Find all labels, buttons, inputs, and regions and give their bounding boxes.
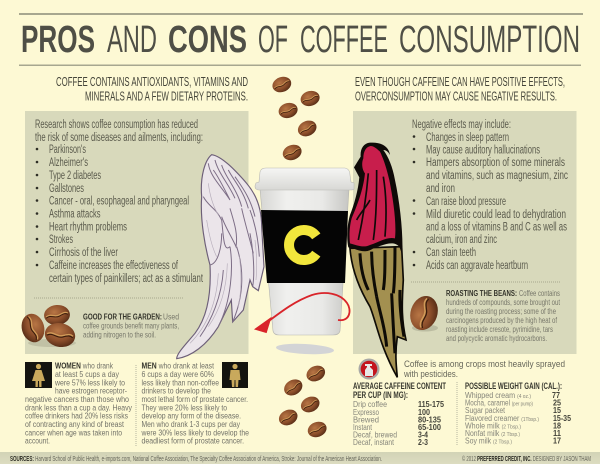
- icon: coffee cup: [255, 168, 354, 356]
- women study text: [25, 362, 132, 446]
- women study text: account.: [25, 436, 50, 446]
- weight gain table: Whipped cream (4 oz.): [465, 391, 531, 400]
- cons bullet list: calcium, iron and zinc: [426, 234, 497, 246]
- weight gain table: 25: [553, 398, 561, 408]
- caffeine content table: 115-175: [418, 400, 444, 409]
- women study text: at least 5 cups a day: [55, 370, 119, 379]
- good for the garden note: adding nitrogen to the soil.: [83, 330, 156, 340]
- icon: man: [222, 362, 248, 388]
- pros bullet list: Cancer - oral, esophageal and pharyngeal: [49, 196, 189, 208]
- caffeine content table: 3-4: [418, 430, 428, 440]
- pros intro text: the risk of some diseases and ailments, including:: [35, 132, 203, 144]
- weight gain table: [465, 381, 571, 446]
- men study text: 6 cups a day were 60%: [142, 370, 214, 379]
- pros intro text: Research shows coffee consumption has reduced: [35, 119, 198, 131]
- pros bullet list: Strokes: [49, 234, 73, 246]
- weight gain table: Mocha, caramel (per pump): [465, 398, 533, 408]
- caffeine content table: Decaf, instant: [353, 438, 395, 447]
- roasting the beans note: Coffee contains: [519, 288, 560, 298]
- caffeine content table: Decaf, brewed: [353, 430, 397, 440]
- weight gain table: Soy milk (2 Tbsp.): [465, 436, 512, 446]
- weight gain table: 15: [553, 406, 561, 415]
- men study text: develop any form of the disease.: [142, 412, 241, 420]
- women study text: have estrogen receptor-: [55, 386, 127, 396]
- good for the garden note: [83, 312, 179, 340]
- cons bullet list: and iron: [426, 183, 455, 195]
- women study text: of contracting any kind of breast: [25, 420, 125, 429]
- icon: pesticide sprayer: [358, 358, 380, 380]
- men study text: Men who drank 1-3 cups per day: [142, 420, 240, 429]
- men study text: less likely than non-coffee: [142, 378, 219, 388]
- cup sleeve: [261, 210, 348, 283]
- pros intro text: [35, 119, 203, 144]
- left intro heading: MINERALS AND A FEW DIETARY PROTEINS.: [85, 88, 248, 104]
- pros bullet list: Parkinson's: [49, 144, 86, 156]
- footer: [0, 452, 600, 464]
- men study text: deadliest form of prostate cancer.: [142, 436, 244, 446]
- cons bullet list: [412, 119, 568, 272]
- pesticide callout: with pesticides.: [403, 369, 458, 379]
- cons bullet list: Acids can aggravate heartburn: [426, 260, 528, 272]
- caffeine content table: 80-135: [418, 416, 441, 424]
- good for the garden note: Used: [163, 312, 179, 322]
- pros bullet list: Alzheimer's: [49, 157, 88, 169]
- sources: SOURCES: Harvard School of Public Health, e-imports.com, National Coffee Association, The Specialty Coffee Association of America, Stroke: Journal of the American Heart Association.: [10, 456, 382, 463]
- weight gain table: 17: [553, 436, 561, 446]
- pros bullet list: Asthma attacks: [49, 208, 101, 220]
- right intro heading: [355, 74, 565, 104]
- pros bullet list: [36, 144, 204, 285]
- roasting coffee bean: [406, 292, 442, 334]
- caffeine content table: Instant: [353, 423, 373, 432]
- falling coffee beans bottom: [276, 363, 329, 440]
- roasting the beans note: ROASTING THE BEANS:: [446, 288, 517, 298]
- women study text: cancer when age was taken into: [25, 428, 122, 438]
- caffeine content table: [353, 381, 446, 447]
- pesticide callout: [358, 358, 565, 380]
- title: [19, 13, 583, 66]
- pros bullet list: Type 2 diabetes: [49, 170, 101, 182]
- good for the garden note: coffee grounds benefit many plants,: [83, 320, 179, 330]
- cons bullet list: Can stain teeth: [426, 247, 476, 259]
- pros bullet list: Cirrhosis of the liver: [49, 247, 118, 259]
- title: OF: [258, 19, 288, 61]
- women study text: were 57% less likely to: [54, 378, 125, 388]
- left intro heading: [56, 74, 248, 104]
- caffeine content table: Brewed: [353, 416, 379, 424]
- icon: white angel wing: [177, 155, 264, 359]
- men study text: most lethal form of prostate cancer.: [142, 395, 248, 404]
- weight gain table: 77: [552, 391, 560, 400]
- weight gain table: 11: [553, 429, 562, 438]
- cons bullet list: Can raise blood pressure: [426, 196, 506, 208]
- women study text: drank less than a cup a day. Heavy: [25, 404, 132, 412]
- weight gain table: Sugar packet: [465, 406, 506, 415]
- cup lid: [255, 168, 354, 190]
- men study text: They were 20% less likely to: [142, 404, 227, 412]
- men study text: drinkers to develop the: [142, 386, 211, 396]
- pros bullet list: certain types of painkillers; act as a stimulant: [49, 273, 204, 285]
- pros bullet list: Caffeine increases the effectiveness of: [49, 260, 179, 272]
- women study text: coffee drinkers had 20% less risks: [25, 412, 128, 420]
- cup shadow: [276, 342, 334, 356]
- caffeine content table: 65-100: [418, 423, 441, 432]
- cons bullet list: May cause auditory hallucinations: [426, 144, 540, 156]
- icon: red devil wing: [347, 143, 406, 377]
- caffeine content table: PER CUP (IN MG):: [353, 390, 408, 401]
- icon: woman: [25, 362, 52, 388]
- caffeine content table: Expresso: [353, 408, 379, 417]
- men study text: were 30% less likely to develop the: [141, 428, 249, 438]
- weight gain table: Flavored creamer (1Tbsp.): [465, 414, 539, 423]
- roasting the beans note: and polycyclic aromatic hydrocarbons.: [446, 333, 547, 343]
- weight gain table: 15-35: [553, 414, 571, 423]
- pesticide callout: Coffee is among crops most heavily sprayed: [404, 359, 565, 369]
- men study text: MEN who drank at least: [142, 362, 215, 370]
- roasting the beans note: [446, 288, 560, 343]
- title: AND: [107, 19, 157, 61]
- good for the garden note: GOOD FOR THE GARDEN:: [83, 312, 162, 322]
- title: PROS: [21, 19, 95, 61]
- women study text: WOMEN who drank: [55, 362, 114, 370]
- cons bullet list: Changes in sleep pattern: [426, 132, 509, 144]
- cup body: [260, 189, 349, 335]
- men study text: [141, 362, 249, 446]
- arrow: [256, 293, 350, 332]
- title: CONS: [168, 19, 247, 61]
- caffeine content table: 100: [418, 408, 430, 417]
- garden coffee beans: [18, 304, 77, 350]
- panel: pros: [18, 111, 248, 354]
- pros bullet list: Gallstones: [49, 183, 84, 195]
- pros bullet list: Heart rhythm problems: [49, 221, 127, 233]
- weight gain table: 18: [553, 422, 561, 430]
- roasting the beans note: during the roasting process; some of the: [446, 306, 556, 316]
- caffeine content table: Drip coffee: [353, 400, 387, 409]
- C logo: [289, 230, 316, 260]
- roasting the beans note: roasting include cresote, pyrimidine, tars: [446, 324, 553, 334]
- roasting the beans note: carcinogens produced by the high heat of: [446, 315, 557, 325]
- women study text: negative cancers than those who: [25, 395, 129, 404]
- caffeine content table: 2-3: [418, 438, 428, 447]
- caffeine content table: AVERAGE CAFFEINE CONTENT: [353, 381, 446, 392]
- weight gain table: Nonfat milk (2 Tbsp.): [465, 429, 520, 438]
- panel: cons: [353, 111, 576, 354]
- title: COFFEE: [300, 19, 388, 61]
- falling coffee beans top: [270, 74, 321, 163]
- cons bullet list: Negative effects may include:: [412, 119, 511, 131]
- left intro heading: COFFEE CONTAINS ANTIOXIDANTS, VITAMINS AND: [56, 74, 248, 89]
- weight gain table: Whole milk (2 Tbsp.): [465, 422, 521, 430]
